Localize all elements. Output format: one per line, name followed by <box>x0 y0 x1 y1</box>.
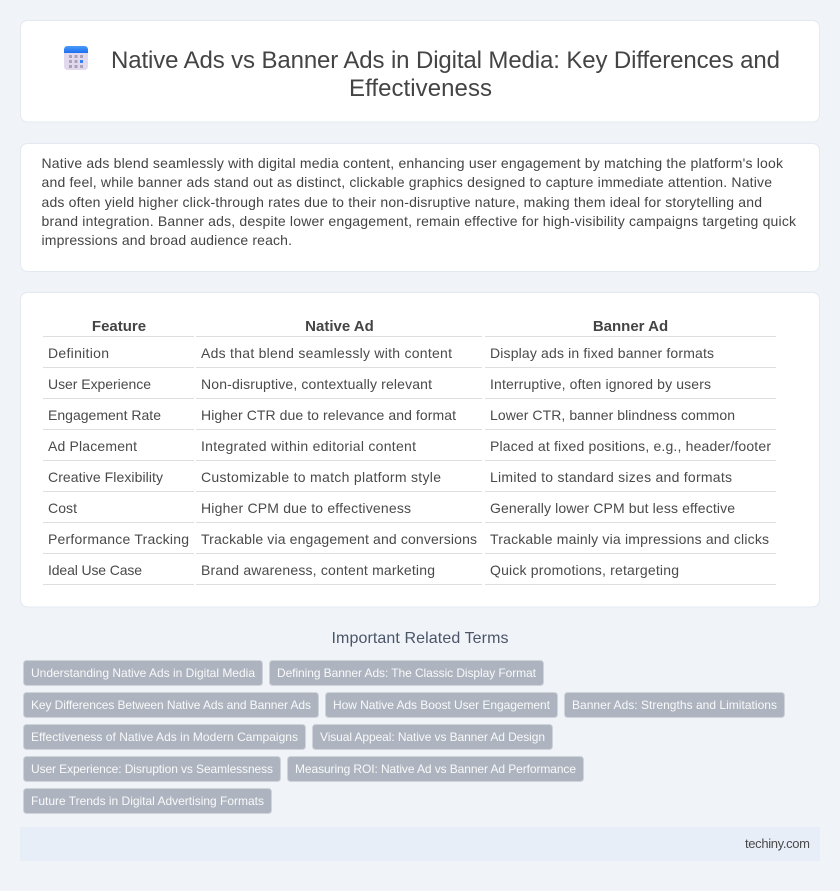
related terms tags: Measuring ROI: Native Ad vs Banner Ad Performance <box>295 762 576 776</box>
related terms tags <box>24 660 784 814</box>
text block: introduction: Native ads blend seamlessly with digital media content, enhancing user engagement by matching the platform's look <box>42 155 784 171</box>
related terms tags: Visual Appeal: Native vs Banner Ad Design <box>320 730 545 744</box>
footer: techiny.com <box>745 836 810 851</box>
footer <box>20 827 820 861</box>
related terms tags: How Native Ads Boost User Engagement <box>333 698 551 712</box>
table rows: Higher CPM due to effectiveness <box>201 500 411 516</box>
table rows: Trackable via engagement and conversions <box>201 531 477 547</box>
table rows: User Experience <box>48 376 151 392</box>
related terms tags: User Experience: Disruption vs Seamlessness <box>31 762 273 776</box>
related terms tags: Banner Ads: Strengths and Limitations <box>572 698 777 712</box>
table rows: Customizable to match platform style <box>201 469 441 485</box>
table rows: Generally lower CPM but less effective <box>490 500 735 516</box>
table header <box>92 318 668 335</box>
text block: introduction: and feel, while banner ads stand out as distinct, clickable graphics designed to capture immediate attention. Native <box>42 174 772 190</box>
heading: related terms: Important Related Terms <box>332 630 508 647</box>
table rows: Ideal Use Case <box>48 562 142 578</box>
table header: Native Ad <box>305 318 374 335</box>
panel: title header <box>20 20 820 122</box>
table header: Banner Ad <box>593 318 668 335</box>
related terms tags: Understanding Native Ads in Digital Media <box>31 666 255 680</box>
table rows: Trackable mainly via impressions and clicks <box>490 531 769 547</box>
table rows: Display ads in fixed banner formats <box>490 345 714 361</box>
table rows: Ads that blend seamlessly with content <box>201 345 452 361</box>
table rows: Brand awareness, content marketing <box>201 562 435 578</box>
table header: Feature <box>92 318 146 335</box>
table rows: Lower CTR, banner blindness common <box>490 407 735 423</box>
title: Native Ads vs Banner Ads in Digital Media: Key Differences and <box>111 47 780 74</box>
text block: introduction: brand integration. Banner ads, despite lower engagement, remain effective for high-visibility campaigns targeting quick <box>42 213 797 229</box>
title <box>111 47 780 102</box>
table rows: Interruptive, often ignored by users <box>490 376 711 392</box>
panel: comparison table <box>20 292 820 607</box>
table rows: Performance Tracking <box>48 531 189 547</box>
table rows <box>48 345 771 578</box>
table rows: Creative Flexibility <box>48 469 163 485</box>
text block: introduction: ads often yield higher click-through rates due to their non-disruptive nature, making them ideal for storytelling and <box>42 194 762 210</box>
related terms tags: Future Trends in Digital Advertising Formats <box>31 794 264 808</box>
table rows: Higher CTR due to relevance and format <box>201 407 456 423</box>
table rows: Non-disruptive, contextually relevant <box>201 376 432 392</box>
table rows: Quick promotions, retargeting <box>490 562 679 578</box>
related terms tags: Effectiveness of Native Ads in Modern Campaigns <box>31 730 298 744</box>
table rows: Integrated within editorial content <box>201 438 416 454</box>
table rows: Ad Placement <box>48 438 137 454</box>
title: Effectiveness <box>349 75 492 102</box>
panel: introduction text <box>20 144 820 272</box>
text block: introduction <box>42 155 797 248</box>
table rows: Placed at fixed positions, e.g., header/footer <box>490 438 771 454</box>
table rows: Engagement Rate <box>48 407 161 423</box>
table rows: Definition <box>48 345 109 361</box>
table rows: Limited to standard sizes and formats <box>490 469 732 485</box>
text block: introduction: impressions and broad audience reach. <box>42 232 292 248</box>
related terms tags: Defining Banner Ads: The Classic Display Format <box>277 666 537 680</box>
table rows: Cost <box>48 500 77 516</box>
icon: calendar <box>64 46 88 70</box>
related terms tags: Key Differences Between Native Ads and Banner Ads <box>31 698 311 712</box>
